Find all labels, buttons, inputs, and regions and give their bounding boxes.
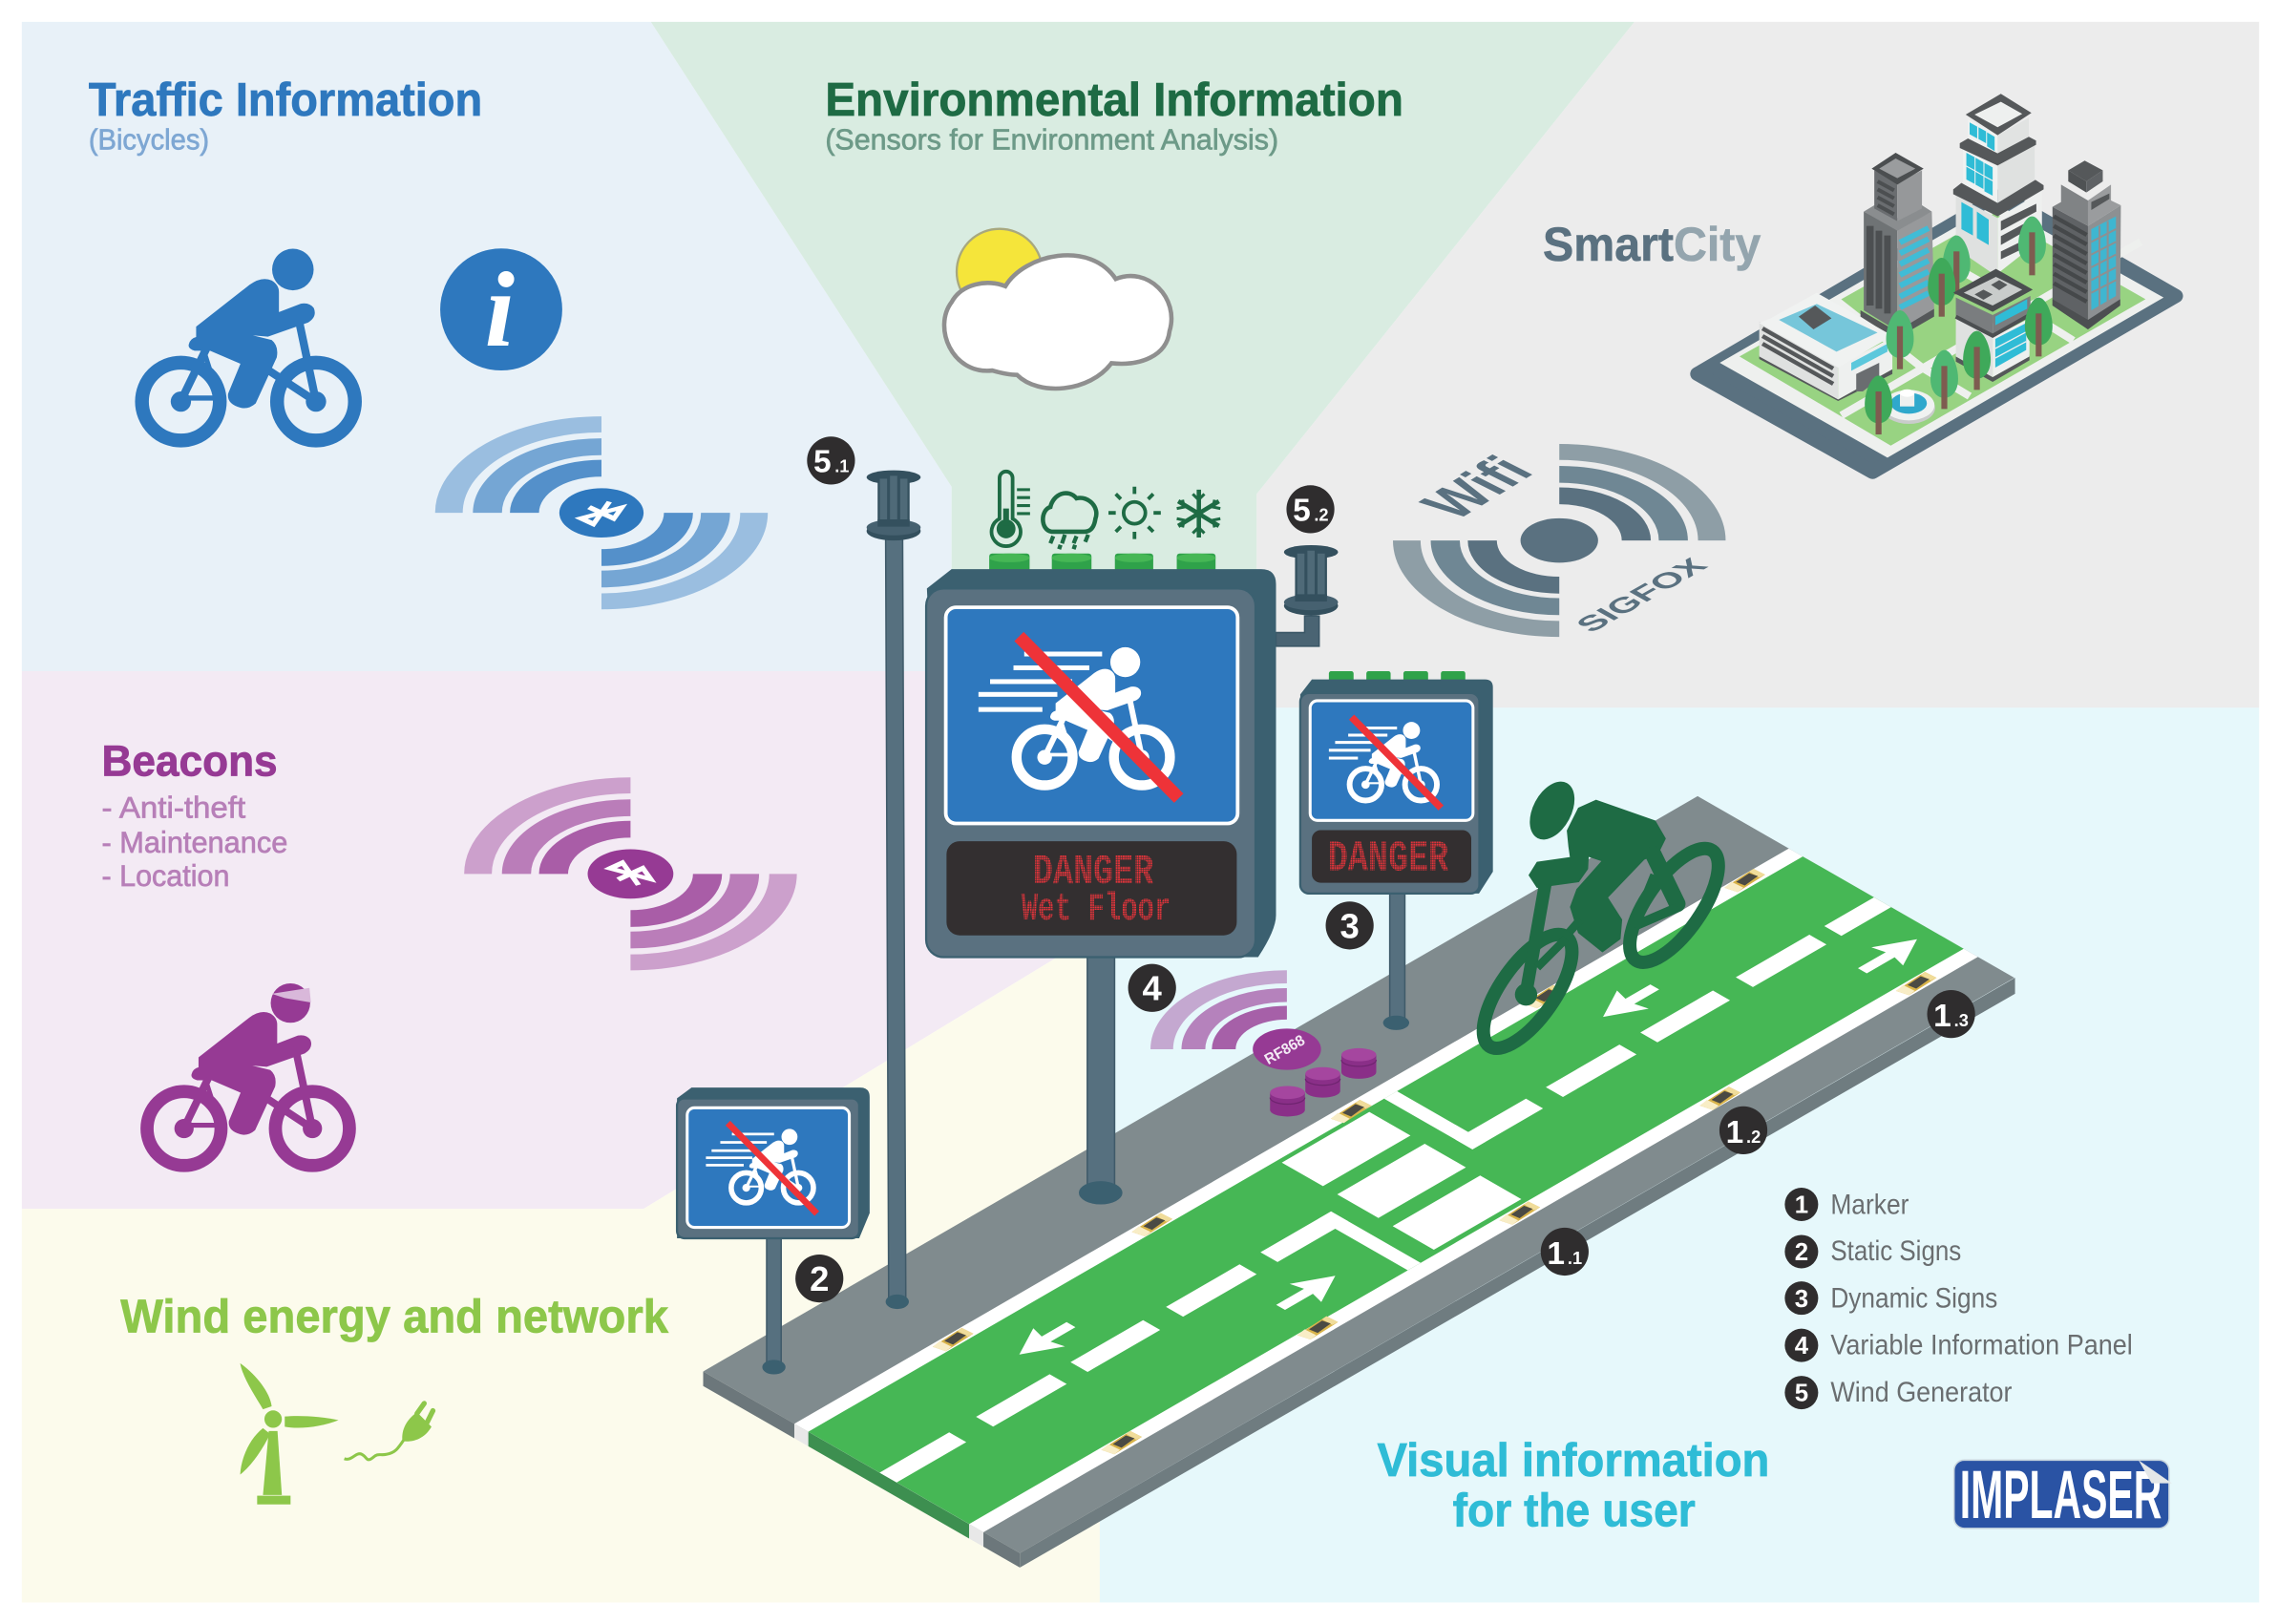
subheading: bicycles: (Bicycles) [89, 124, 209, 157]
dynamic sign 3: DANGER [1328, 834, 1449, 884]
road slab sides [703, 978, 2015, 1568]
beacon devices rf868 [1162, 977, 1376, 1116]
list: beacon uses: - Anti-theft [102, 791, 246, 825]
road markers [933, 869, 1936, 1454]
heading: wind energy: Wind energy and network [120, 1291, 669, 1342]
sensor caps [989, 554, 1215, 580]
icon: blue bluetooth signal [449, 425, 754, 601]
subheading: sensors: (Sensors for Environment Analysis) [825, 124, 1278, 157]
badge 1.1: .1 [1568, 1248, 1582, 1268]
building: low block with blue roof [1760, 293, 1892, 401]
icon: information circle [440, 248, 562, 370]
icon: thermometer [992, 472, 1030, 546]
legend [1784, 1188, 2133, 1409]
icon: sun and cloud [944, 229, 1171, 389]
badge 1.2 [1719, 1107, 1767, 1154]
green isometric cyclist [1467, 774, 1735, 1062]
road surface [703, 796, 2014, 1553]
trees front [1887, 310, 1958, 409]
panel: smart city [1256, 22, 2259, 707]
building: small mid block [1953, 269, 2033, 382]
icon: snowflake [1177, 490, 1220, 538]
badge 1.2: 1 [1726, 1115, 1743, 1150]
heading: environmental information: Environmental Information [825, 74, 1403, 126]
badge 1.3: 1 [1933, 999, 1951, 1034]
center line dashes [809, 856, 1964, 1524]
legend: 1 [1795, 1192, 1808, 1219]
icon: sun [1108, 487, 1161, 539]
badge 1.3: .3 [1954, 1010, 1969, 1030]
badge 1.3 [1928, 990, 1975, 1038]
led text: DANGER [1033, 849, 1154, 896]
panel: traffic information [22, 22, 952, 671]
legend: 3 [1795, 1286, 1808, 1313]
wind generator 5.2 [1276, 545, 1338, 646]
badge 1.2: .2 [1746, 1127, 1761, 1147]
icon: wifi and sigfox signal: SIGFOX [1569, 554, 1715, 637]
heading: beacons: Beacons [102, 737, 278, 786]
heading: smart city: City [1674, 218, 1761, 271]
heading: visual information: for the user [1453, 1486, 1696, 1537]
legend: Variable Information Panel [1830, 1330, 2133, 1361]
building: white tall tower [1953, 94, 2043, 277]
heading: smart city [1543, 218, 1761, 271]
illustration: isometric city on tablet [1698, 94, 2176, 472]
icons: weather sensors [992, 472, 1220, 549]
legend: Static Signs [1830, 1235, 1961, 1267]
badge 5.1: .1 [834, 456, 849, 476]
led text: Wet Floor [1022, 888, 1171, 932]
badge 2: 2 [810, 1259, 829, 1298]
building: dark tower right [2053, 160, 2120, 329]
icon: purple bluetooth signal [478, 786, 783, 962]
badge 4: 4 [1143, 969, 1163, 1008]
fountain [1883, 390, 1935, 424]
badge 5.2: .2 [1314, 505, 1329, 525]
badge 5.1: 5 [813, 445, 832, 480]
icon: information circle: i [485, 251, 515, 369]
icon: rain cloud [1043, 494, 1096, 549]
panel: beacons [22, 671, 1100, 1209]
heading: smart city: Smart [1543, 218, 1674, 271]
icon: wifi and sigfox signal: Wifi [1407, 448, 1548, 527]
list: beacon uses: - Location [102, 859, 229, 893]
legend: 5 [1795, 1381, 1808, 1407]
lane arrows [1003, 878, 1933, 1416]
logo: implaser [1954, 1457, 2172, 1533]
variable information panel 4 [926, 554, 1276, 1205]
panel: visual information for the user [1100, 707, 2259, 1602]
trees behind [1928, 217, 2046, 317]
legend: 4 [1795, 1333, 1809, 1360]
badge 4 [1128, 964, 1176, 1012]
dynamic sign 3 [1300, 671, 1493, 1030]
trees middle [1963, 298, 2053, 390]
badge 5.2: 5 [1293, 494, 1311, 529]
icon: plug and cable [345, 1403, 432, 1460]
legend: Dynamic Signs [1830, 1282, 1997, 1314]
heading: visual information [1378, 1435, 1769, 1537]
icon: wind turbine [241, 1363, 339, 1505]
building: dark tower left [1861, 153, 1934, 339]
beacon devices rf868: RF868 [1262, 1032, 1308, 1068]
badge 5.2 [1286, 485, 1335, 533]
panel: wind energy and network [22, 931, 1100, 1602]
legend: 2 [1795, 1239, 1808, 1266]
list: beacon uses [102, 791, 287, 893]
icon: purple cyclist with helmet [147, 983, 349, 1166]
wind generator 5.1 [867, 471, 920, 1309]
zebra crossing [1282, 1112, 1521, 1250]
road: isometric bike lane [703, 796, 2015, 1568]
badge 1.1: 1 [1547, 1236, 1565, 1272]
badge 3 [1326, 901, 1374, 949]
icon: blue cyclist [142, 249, 355, 440]
legend: Wind Generator [1830, 1377, 2013, 1408]
led text [1022, 849, 1171, 932]
legend: Marker [1830, 1190, 1909, 1221]
badge 5.1 [807, 436, 855, 485]
icon: wifi and sigfox signal [1406, 448, 1715, 637]
badge 3: 3 [1339, 906, 1360, 945]
static sign 2 [677, 1087, 870, 1375]
list: beacon uses: - Maintenance [102, 826, 287, 859]
heading: traffic information: Traffic Information [89, 74, 482, 126]
panel: environmental information [651, 22, 1635, 610]
heading: visual information: Visual information [1378, 1435, 1769, 1487]
badge 2 [795, 1255, 843, 1302]
badge 1.1 [1541, 1228, 1589, 1276]
